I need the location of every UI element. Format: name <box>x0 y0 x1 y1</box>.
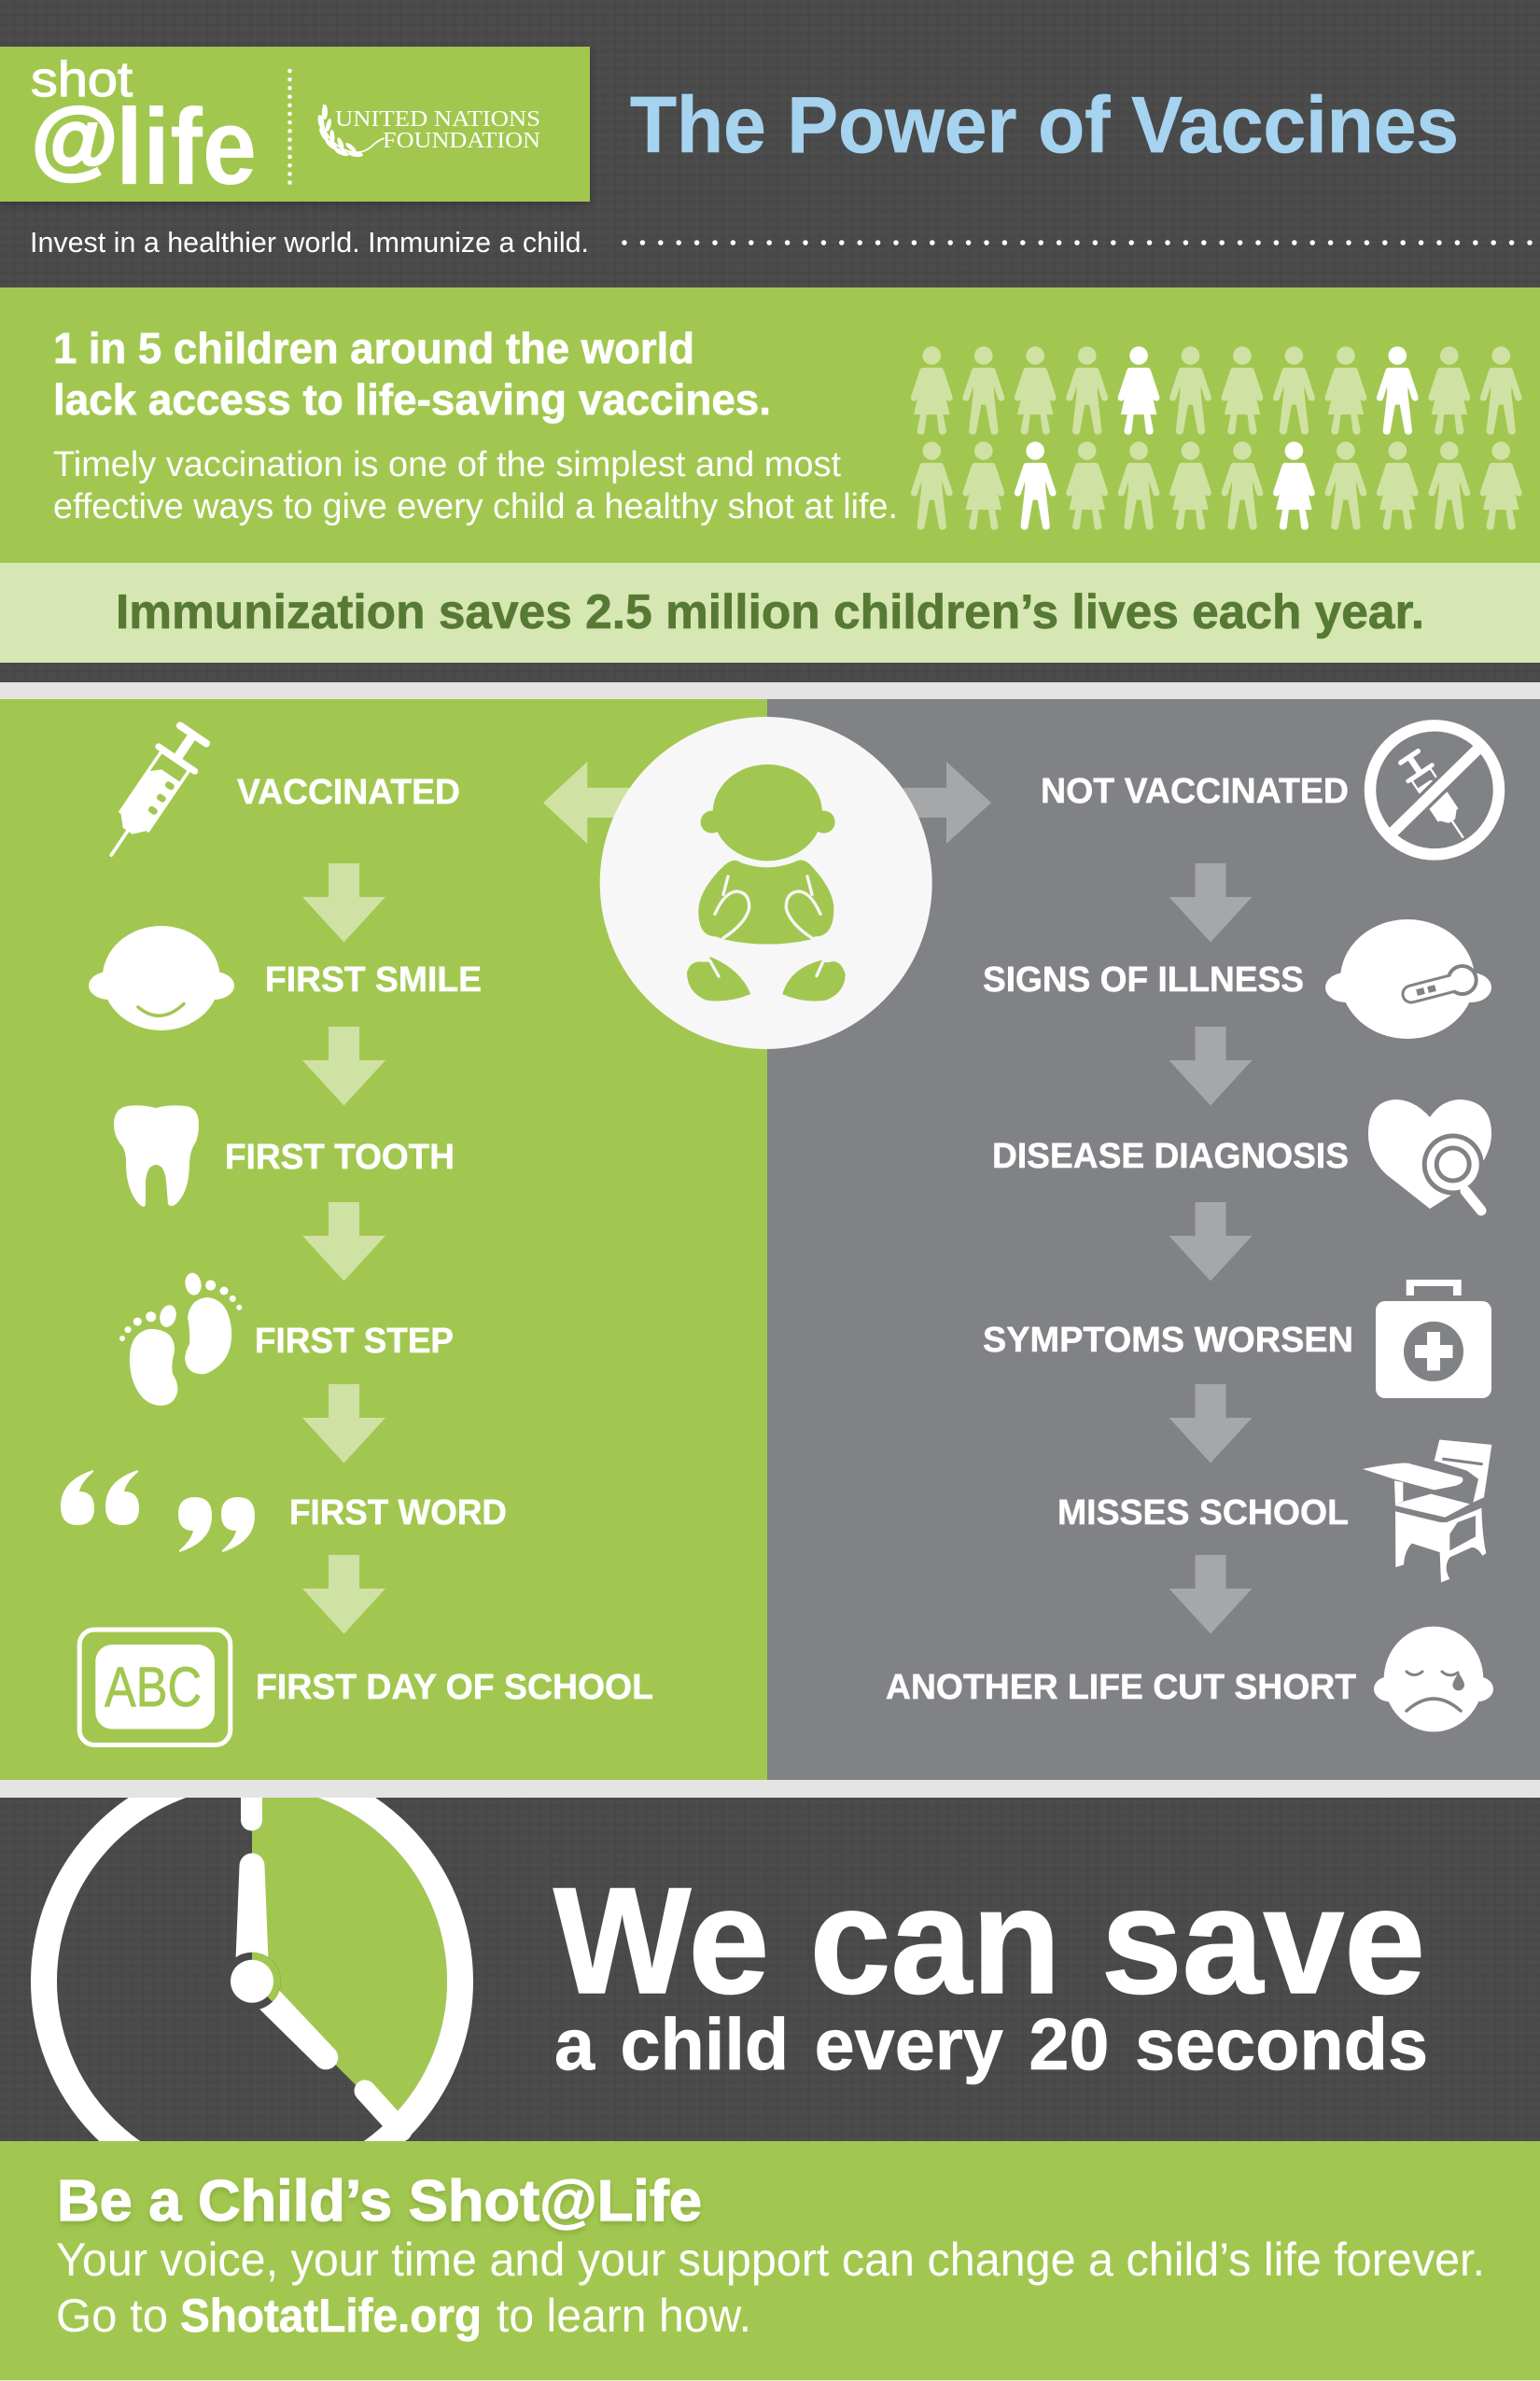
label: first word: FIRST WORD <box>289 1493 507 1533</box>
arrow down 2 <box>302 1027 385 1105</box>
banner text: Immunization saves 2.5 million children’s lives each year. <box>116 585 1424 639</box>
panel: 1 in 5 children <box>0 287 1540 563</box>
label: not vaccinated: NOT VACCINATED <box>1041 772 1349 811</box>
subheadline: a child every 20 seconds <box>554 2003 1428 2085</box>
logo: shot@life <box>31 52 257 207</box>
label: signs of illness: SIGNS OF ILLNESS <box>983 960 1304 1000</box>
arrow down 1 <box>1169 863 1253 943</box>
arrow: right to not vaccinated <box>877 762 991 844</box>
body text <box>53 445 898 526</box>
CTA line 2: ShotatLife.org <box>180 2290 482 2342</box>
icon: sick baby with thermometer <box>1325 919 1491 1039</box>
logo: shot@life: life <box>116 86 257 207</box>
header panel <box>0 0 1540 287</box>
headline: We can save <box>553 1856 1425 2025</box>
label: disease diagnosis: DISEASE DIAGNOSIS <box>992 1137 1349 1176</box>
CTA line 2: to learn how. <box>497 2290 751 2342</box>
icon: syringe <box>90 718 217 871</box>
icon: medical kit <box>1376 1280 1491 1398</box>
label: vaccinated: VACCINATED <box>237 773 460 812</box>
icon: ABC chalkboard <box>79 1630 231 1745</box>
body text: effective ways to give every child a healthy shot at life. <box>53 487 898 526</box>
icon: school desk <box>1363 1439 1491 1582</box>
United Nations Foundation logo <box>316 105 540 158</box>
panel: not vaccinated <box>767 699 1540 1780</box>
arrow down 1 <box>302 863 385 943</box>
dark strip and divider <box>0 663 1540 699</box>
banner: immunization saves <box>0 563 1540 663</box>
icon: clock <box>31 1798 473 2141</box>
logo box <box>0 47 590 207</box>
arrow down 3 <box>1169 1202 1253 1281</box>
label: misses school: MISSES SCHOOL <box>1057 1493 1349 1533</box>
label: first smile: FIRST SMILE <box>265 960 482 1000</box>
arrow: left to vaccinated <box>543 762 653 844</box>
CTA line 2: Go to <box>56 2290 168 2342</box>
label: symptoms worsen: SYMPTOMS WORSEN <box>983 1321 1353 1360</box>
arrow down 5 <box>302 1555 385 1633</box>
icon: heart with magnifier <box>1368 1099 1491 1211</box>
label: first day of school: FIRST DAY OF SCHOOL <box>256 1668 653 1707</box>
arrow down 4 <box>302 1384 385 1464</box>
heading: 1 in 5 children: 1 in 5 children around the world <box>53 324 694 372</box>
icon: tooth <box>114 1105 199 1207</box>
panel: vaccinated <box>0 699 767 1780</box>
tagline: Invest in a healthier world. Immunize a child. <box>30 226 589 259</box>
arrow down 3 <box>302 1202 385 1281</box>
center baby circle <box>600 717 932 1049</box>
arrow down 2 <box>1169 1027 1253 1105</box>
arrow down 4 <box>1169 1384 1253 1464</box>
arrow down 5 <box>1169 1555 1253 1633</box>
body text: Timely vaccination is one of the simplest and most <box>53 445 841 484</box>
logo: shot@life: shot <box>31 52 133 107</box>
panel: call to action <box>0 2141 1540 2381</box>
CTA heading: Be a Child’s Shot@Life <box>57 2169 702 2234</box>
icon: baby footprints <box>119 1271 242 1406</box>
title: The Power of Vaccines <box>630 81 1459 170</box>
CTA line 2 <box>56 2290 751 2342</box>
label: first tooth: FIRST TOOTH <box>225 1138 455 1177</box>
icon: no syringe <box>1370 725 1499 854</box>
icon: crying baby <box>1374 1627 1493 1731</box>
icon: seated baby <box>687 764 846 1001</box>
pictogram: 24 children, 4 highlighted <box>912 347 1521 529</box>
icon: smiling baby <box>89 926 234 1030</box>
United Nations Foundation logo: FOUNDATION <box>383 129 540 153</box>
label: first step: FIRST STEP <box>255 1322 454 1361</box>
United Nations Foundation logo: UNITED NATIONS <box>335 107 540 132</box>
CTA line 1: Your voice, your time and your support can change a child’s life forever. <box>56 2234 1485 2286</box>
icon: quotation marks <box>61 1470 255 1552</box>
label: another life cut short: ANOTHER LIFE CUT SHORT <box>886 1668 1356 1707</box>
logo: shot@life: @ <box>32 91 118 187</box>
dotted divider <box>287 71 292 183</box>
panel: we can save <box>0 1798 1540 2141</box>
divider <box>0 1780 1540 1798</box>
heading: 1 in 5 children: lack access to life-saving vaccines. <box>53 375 771 424</box>
heading: 1 in 5 children <box>53 324 771 424</box>
dotted rule <box>624 240 1540 245</box>
icon: ABC chalkboard: ABC <box>105 1656 202 1718</box>
